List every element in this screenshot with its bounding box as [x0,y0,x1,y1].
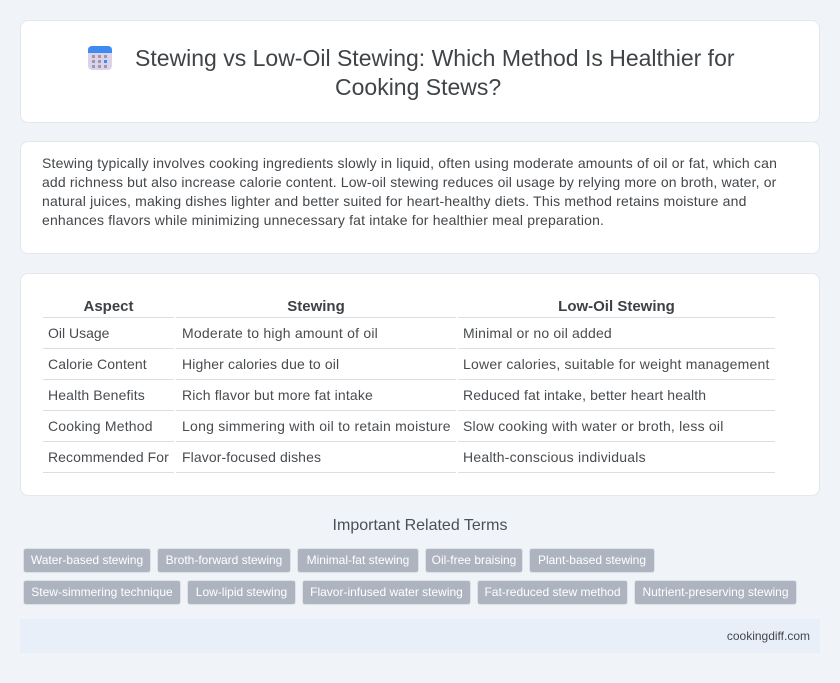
row: health benefits: Health Benefits [48,387,145,403]
row: health benefits: Rich flavor but more fat intake [182,387,373,403]
panel: introduction [20,141,820,254]
tag [23,548,151,573]
row: cooking method: Long simmering with oil to retain moisture [182,418,451,434]
tag: Stew-simmering technique [31,585,173,599]
tag [157,548,291,573]
table header: Stewing [287,298,345,315]
panel: comparison table [20,273,820,496]
tag: Minimal-fat stewing [307,553,409,567]
tag: Fat-reduced stew method [484,585,621,599]
row: oil usage: Minimal or no oil added [463,325,612,341]
tag [187,580,296,605]
row: oil usage: Oil Usage [48,325,109,341]
table header: Low-Oil Stewing [558,298,675,315]
tag: Broth-forward stewing [166,553,282,567]
row: recommended for: Flavor-focused dishes [182,449,321,465]
icon: calendar [88,46,112,70]
row: cooking method: Cooking Method [48,418,153,434]
tag: Nutrient-preserving stewing [642,585,789,599]
text block: introduction: Stewing typically involves cooking ingredients slowly in liquid, often using moderate amounts of oil or fat, which can [42,155,777,171]
text block: introduction [42,155,777,228]
row: calorie content: Higher calories due to oil [182,356,339,372]
tag [297,548,419,573]
tag: Oil-free braising [432,553,516,567]
footer source text: cookingdiff.com [727,629,810,643]
row: recommended for: Recommended For [48,449,169,465]
panel: header [20,20,820,123]
row: health benefits [43,387,775,411]
row: recommended for [43,449,775,473]
tag: Water-based stewing [31,553,143,567]
table header: Aspect [83,298,134,315]
row: oil usage: Moderate to high amount of oil [182,325,378,341]
row: health benefits: Reduced fat intake, better heart health [463,387,706,403]
footer [20,619,820,653]
tag: Flavor-infused water stewing [310,585,463,599]
panel: header: Stewing vs Low-Oil Stewing: Which Method Is Healthier for [135,45,735,71]
tag [23,580,181,605]
tag: Low-lipid stewing [196,585,287,599]
row: calorie content [43,356,775,380]
table header [43,298,775,318]
row: cooking method [43,418,775,442]
tag [477,580,628,605]
panel: header: Cooking Stews? [335,74,501,100]
tag: Plant-based stewing [538,553,646,567]
row: recommended for: Health-conscious individuals [463,449,646,465]
row: calorie content: Calorie Content [48,356,147,372]
row: oil usage [43,325,775,349]
panel: related term tags [23,548,797,605]
tag [302,580,471,605]
text block: introduction: enhances flavors while minimizing unnecessary fat intake for healthier meal preparation. [42,212,604,228]
tag [634,580,797,605]
row: cooking method: Slow cooking with water or broth, less oil [463,418,724,434]
tag [425,548,523,573]
text block: introduction: add richness but also increase calorie content. Low-oil stewing reduces oil usage by relying more on broth, water, or [42,174,776,190]
row: calorie content: Lower calories, suitable for weight management [463,356,770,372]
tag [529,548,655,573]
text block: introduction: natural juices, making dishes lighter and better suited for heart-healthy diets. This method retains moisture and [42,193,747,209]
heading: related terms: Important Related Terms [333,517,507,534]
title [135,45,735,100]
